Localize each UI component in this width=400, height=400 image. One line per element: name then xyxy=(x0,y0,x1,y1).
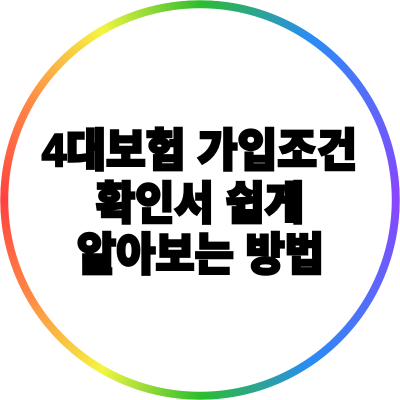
title line 2: 확인서 쉽게 xyxy=(96,178,304,229)
title line 1: 4대보험 가입조건 xyxy=(42,125,357,176)
title line 3: 알아보는 방법 xyxy=(77,229,324,280)
